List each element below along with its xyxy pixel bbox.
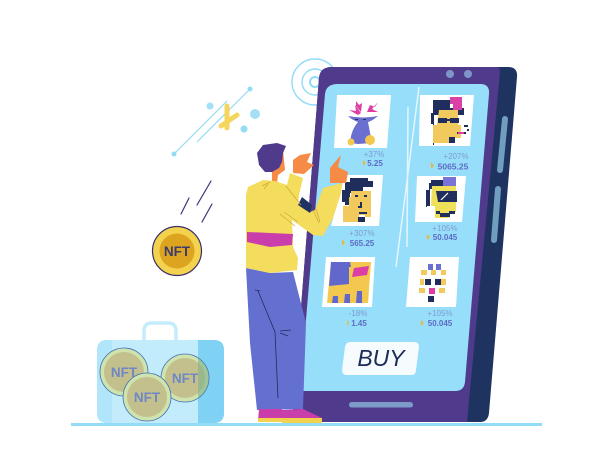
waist band (247, 232, 293, 247)
camera dots (446, 70, 472, 78)
dark cuff (298, 197, 312, 213)
icon: signal rings (292, 59, 338, 105)
phone body (292, 67, 517, 422)
bag body (97, 340, 224, 423)
shoes (258, 409, 322, 422)
price labels: 5.25 (367, 159, 383, 168)
gold NFT coin (152, 226, 202, 276)
price labels: +307% (349, 229, 375, 238)
phone (292, 67, 517, 422)
price labels: +207% (443, 152, 469, 161)
price labels: -18% (349, 309, 367, 318)
screen (300, 84, 489, 391)
BUY button: BUY (357, 345, 406, 371)
gold NFT coin: NFT (164, 244, 191, 259)
pants (246, 268, 306, 410)
glass bag (97, 323, 224, 423)
ground line (71, 423, 542, 426)
NFT card 6 (406, 257, 459, 307)
side buttons (494, 119, 505, 240)
NFT card 2 (419, 95, 474, 146)
price labels: 5065.25 (438, 162, 469, 172)
price labels: 50.045 (428, 319, 453, 328)
NFT card 5 (322, 257, 375, 307)
price labels: 50.045 (433, 233, 458, 242)
price labels: +37% (364, 150, 384, 159)
person (246, 143, 348, 423)
price labels: 1.45 (351, 319, 367, 328)
NFT card 3 (331, 175, 383, 226)
coin: NFT bottom: NFT (134, 390, 161, 405)
head (272, 150, 285, 183)
price labels: +105% (427, 309, 453, 318)
NFT card 4 (415, 176, 466, 222)
pointing hand (330, 155, 348, 183)
decorative sparkle (172, 86, 260, 156)
motion lines (181, 181, 212, 222)
sweater (246, 173, 342, 273)
price labels: +105% (432, 224, 458, 233)
home bar (349, 402, 413, 408)
sweater fold lines (262, 182, 320, 226)
price labels: 565.25 (350, 239, 375, 248)
price labels (342, 150, 469, 328)
bag handle (144, 323, 176, 340)
BUY button (342, 342, 419, 375)
coin: NFT right: NFT (172, 371, 199, 386)
screen dividers (396, 87, 419, 267)
NFT card 1 (334, 95, 391, 148)
coin: NFT left: NFT (111, 365, 138, 380)
raised hand (293, 153, 314, 174)
